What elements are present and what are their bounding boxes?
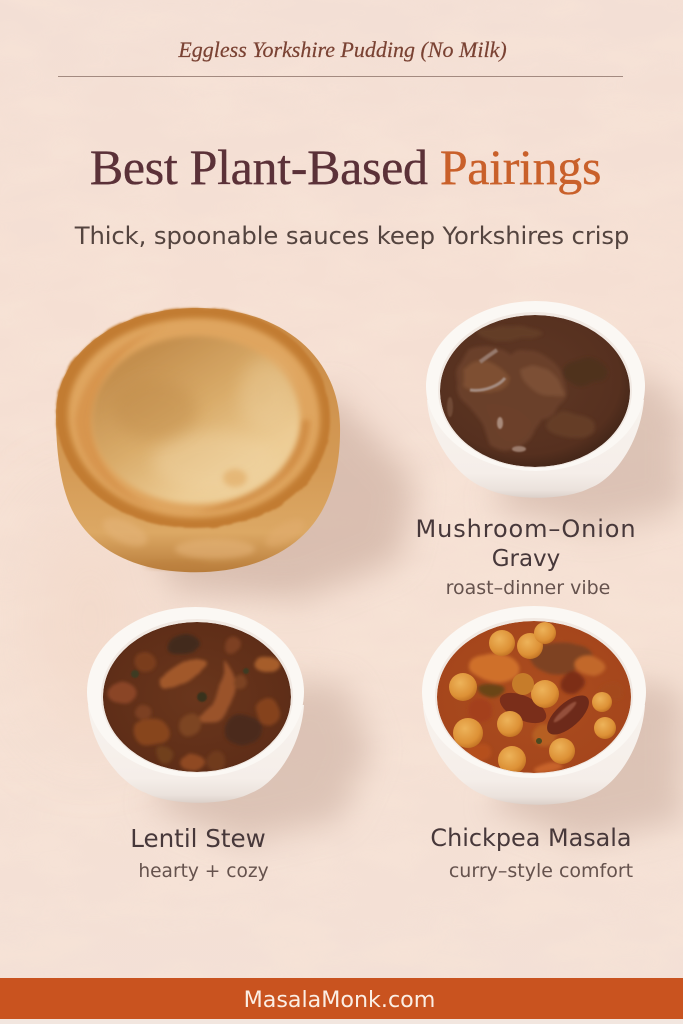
- bowl: chickpea masala: [422, 606, 683, 842]
- label: chickpea masala: curry–style comfort: [449, 860, 633, 882]
- footer website text: MasalaMonk.com: [244, 987, 435, 1013]
- label: lentil stew: [130, 824, 269, 882]
- label: chickpea masala: Chickpea Masala: [430, 824, 632, 852]
- gravy surface: [440, 315, 630, 467]
- label: lentil stew: hearty + cozy: [138, 861, 269, 882]
- label: chickpea masala: [430, 824, 633, 882]
- label: mushroom-onion gravy: [416, 515, 636, 599]
- pudding side wall: [56, 308, 340, 572]
- label: mushroom-onion gravy: Mushroom–Onion: [416, 515, 636, 543]
- pudding rim: [56, 308, 330, 528]
- label: lentil stew: Lentil Stew: [130, 824, 266, 853]
- subtitle: Thick, spoonable sauces keep Yorkshires crisp: [75, 221, 629, 250]
- yorkshire pudding: [56, 308, 415, 600]
- bowl: mushroom-onion gravy: [426, 301, 683, 530]
- label: mushroom-onion gravy: Gravy: [492, 546, 560, 572]
- pudding inner well: [92, 336, 300, 504]
- footer band: [0, 978, 683, 1024]
- label: mushroom-onion gravy: roast–dinner vibe: [446, 577, 610, 599]
- bowl: lentil stew: [87, 607, 372, 842]
- header divider: [58, 76, 623, 78]
- title: Best Plant-Based Pairings: [90, 139, 601, 195]
- top label: Eggless Yorkshire Pudding (No Milk): [178, 37, 507, 62]
- lentil stew surface: [103, 622, 291, 772]
- chickpea masala surface: [437, 621, 631, 774]
